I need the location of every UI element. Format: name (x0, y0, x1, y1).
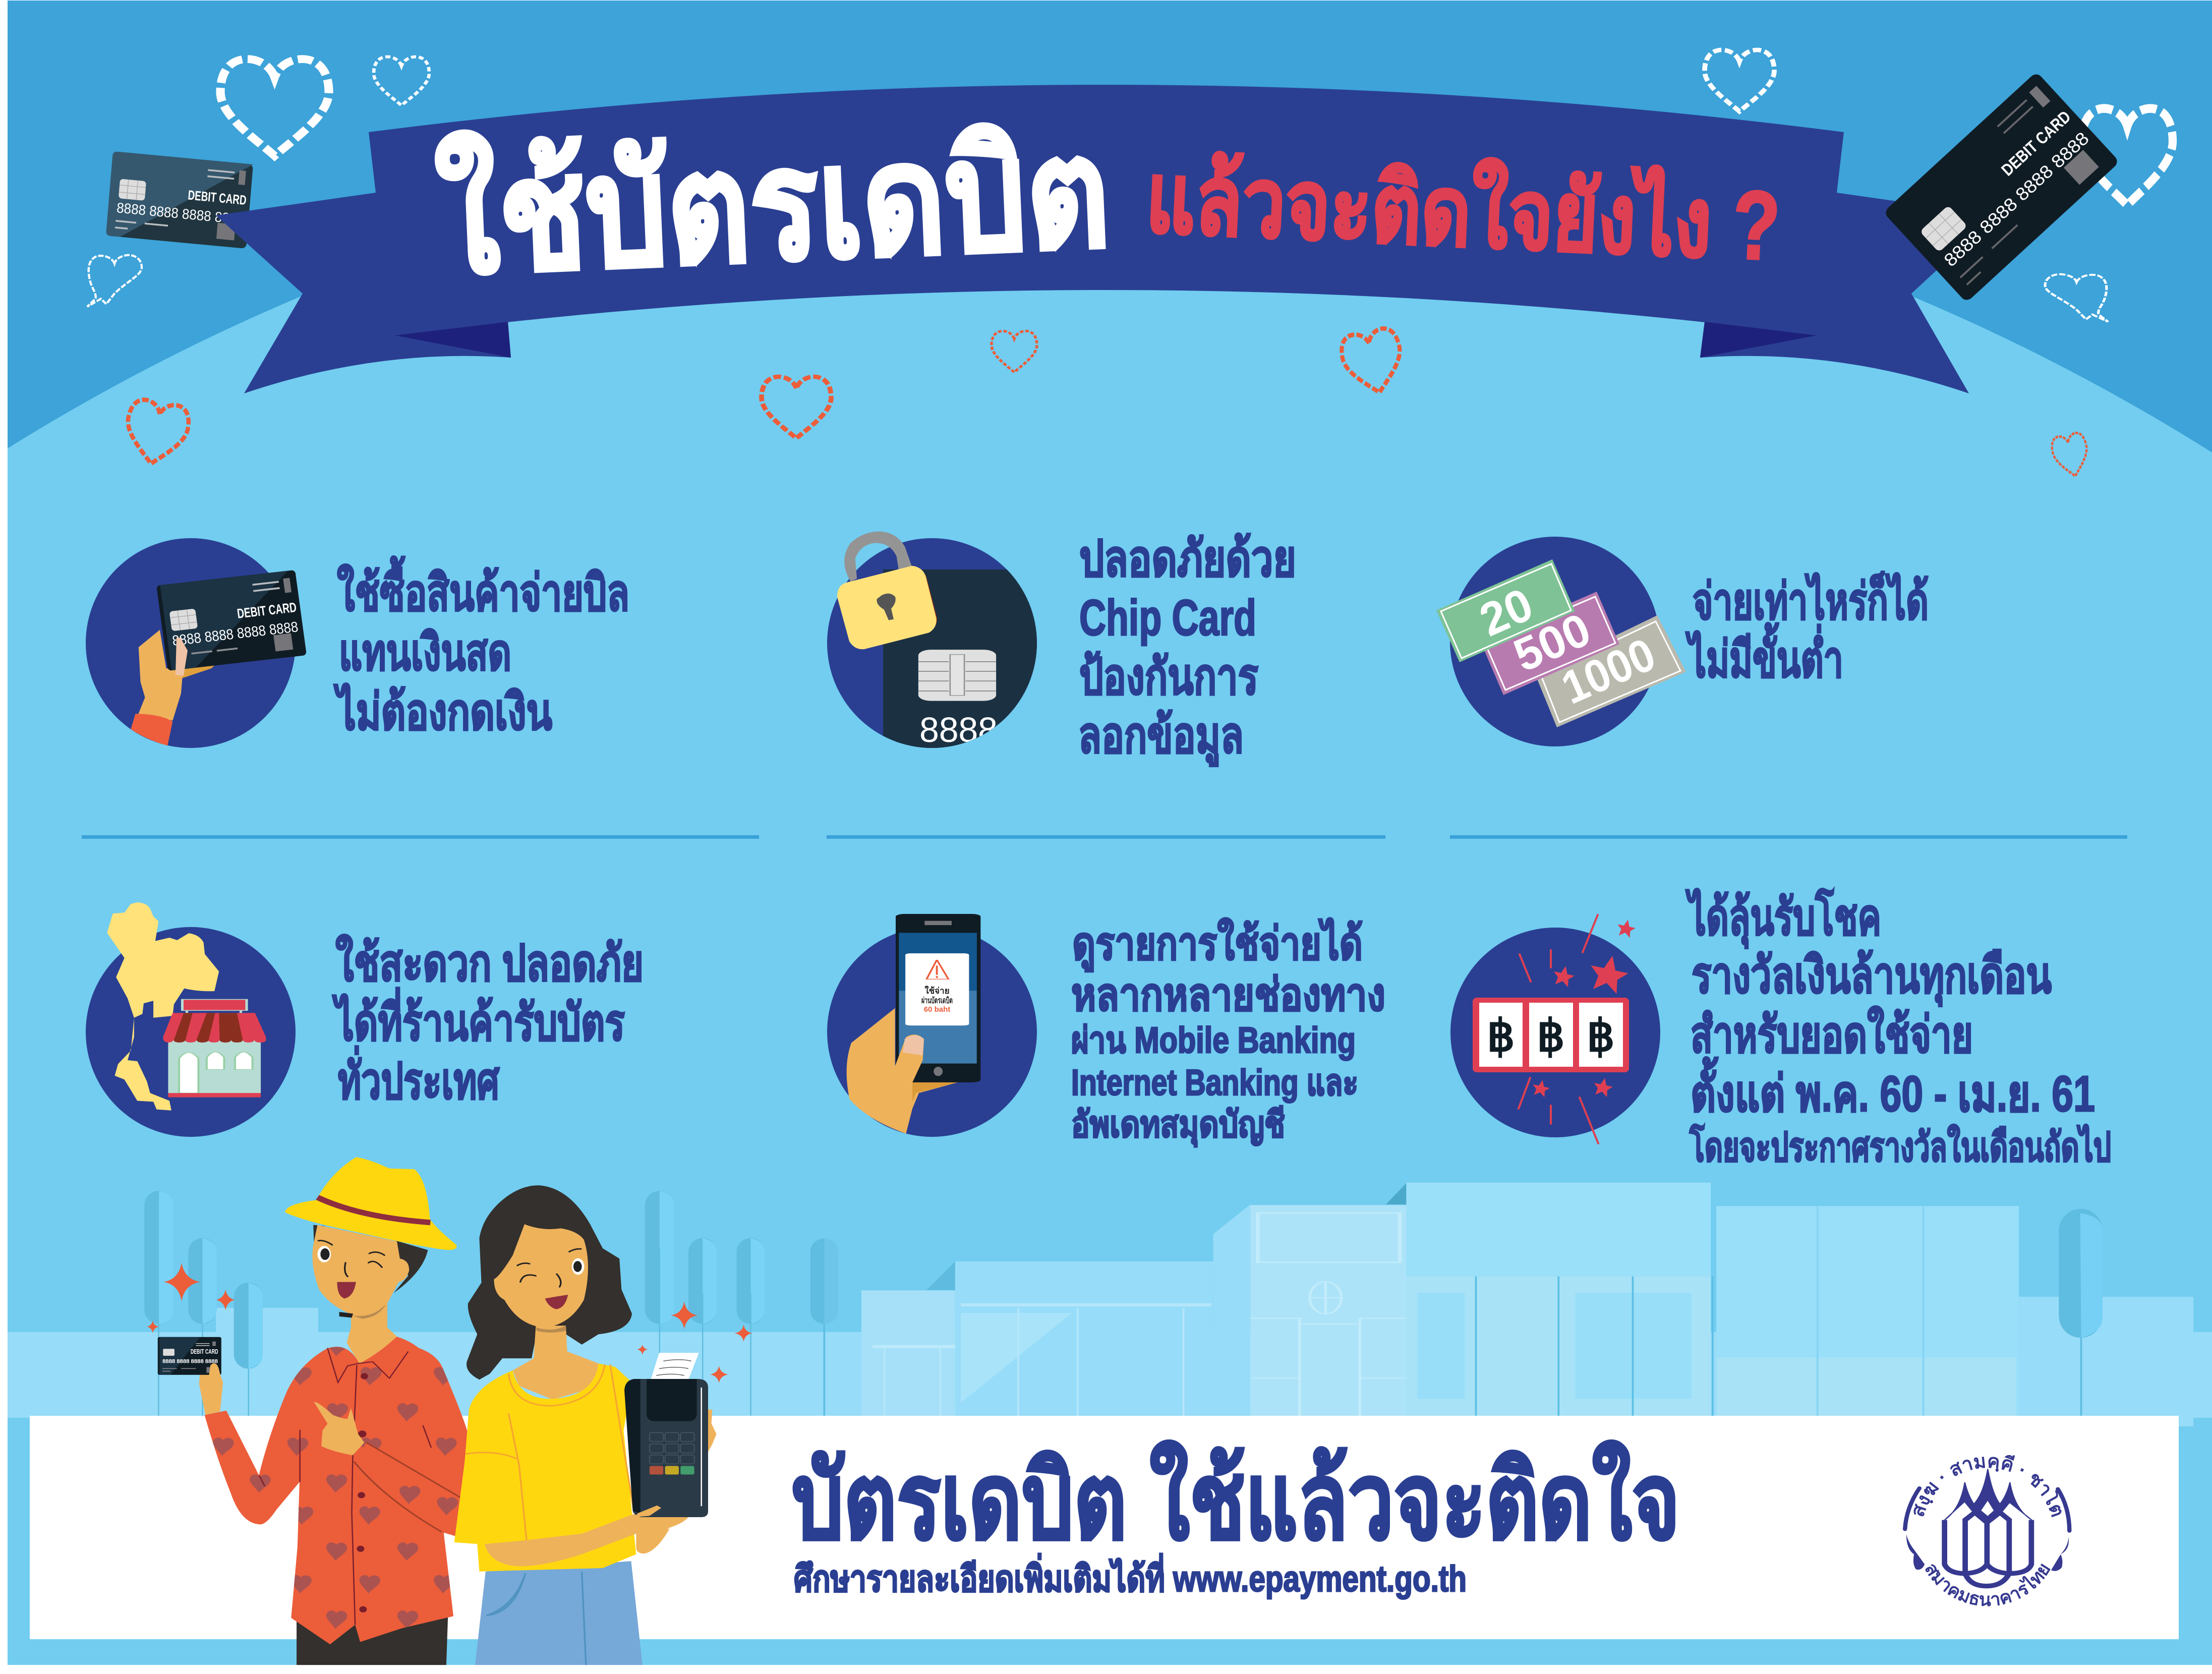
left debit card: 8888 8888 8888 8888 (116, 200, 245, 227)
item 4: shops nationwide (86, 902, 644, 1137)
icon: hand holding card: DEBIT CARD (236, 599, 298, 621)
item 2: chip card security (827, 531, 1296, 767)
man (199, 1225, 468, 1665)
icon: Thailand map and shop (107, 902, 266, 1111)
card in hand (158, 1337, 221, 1375)
text: item 2: ลอกข้อมูล (1078, 707, 1244, 767)
right debit card (1883, 72, 2120, 303)
text: item 3: ไม่มีขั้นต่ำ (1685, 622, 1843, 688)
bottom headline: ศึกษารายละเอียดเพิ่มเติมได้ที่ www.epayment.go.th (794, 1553, 1467, 1599)
left debit card: DEBIT CARD (187, 187, 247, 208)
card in hand: DEBIT CARD (191, 1348, 218, 1355)
text: item 2 (1078, 531, 1296, 767)
title text (433, 103, 1782, 306)
text: item 1: ไม่ต้องกดเงิน (333, 683, 552, 740)
text: item 5: ผ่าน Mobile Banking (1071, 1020, 1356, 1061)
payment terminal (624, 1353, 717, 1517)
logo: Thai Bankers Association: สงฺฆ · สามคฺคี · ชาโต (1913, 1455, 2062, 1517)
icon: slot machine with baht symbols: ฿ (1537, 1011, 1565, 1061)
item 3: banknotes (1436, 537, 1929, 746)
icon: pink note 500 (1481, 592, 1619, 695)
text: item 5: อัพเดทสมุดบัญชี (1071, 1105, 1285, 1147)
card in hand: 8888 8888 8888 8888 (162, 1359, 218, 1364)
text: item 3: จ่ายเท่าไหร่ก็ได้ (1693, 571, 1929, 630)
logo: Thai Bankers Association (1903, 1455, 2072, 1606)
text: item 1: ใช้ซื้อสินค้าจ่ายบิล (337, 556, 629, 621)
text: item 6: ได้ลุ้นรับโชค (1685, 888, 1881, 949)
text: item 6: รางวัลเงินล้านทุกเดือน (1692, 947, 2052, 1007)
sparkles (147, 1263, 752, 1383)
text: item 6: สำหรับยอดใช้จ่าย (1691, 1006, 1973, 1063)
item 1: pay with card (86, 538, 629, 748)
text: item 2: ป้องกันการ (1079, 649, 1258, 705)
icon: pink note 500: 500 (1506, 604, 1598, 682)
yellow hat (285, 1157, 457, 1250)
icon: hand holding card: 8888 8888 8888 8888 (171, 619, 299, 649)
city skyline background (8, 1183, 2212, 1426)
text: item 4: ใช้สะดวก ปลอดภัย (335, 934, 644, 992)
icon: hand holding card (131, 570, 307, 745)
icon: green note 20 (1436, 559, 1575, 662)
text: item 5 (1071, 918, 1385, 1147)
text: item 5: ดูรายการใช้จ่ายได้ (1072, 918, 1363, 972)
dividers (82, 835, 2127, 839)
icon: slot machine with baht symbols: ฿ (1587, 1011, 1615, 1061)
icon: chip card with padlock: 8888 (919, 710, 998, 749)
item 6: prize draw (1450, 888, 2111, 1170)
bottom headline: บัตรเดบิต ใช้แล้วจะติดใจ (792, 1440, 1680, 1561)
icon: green note 20: 20 (1472, 579, 1540, 646)
icon: slot machine with baht symbols: ฿ (1487, 1011, 1515, 1061)
title text: ใช้บัตรเดบิต (433, 103, 1113, 306)
text: item 2: Chip Card (1079, 590, 1256, 646)
title ribbon (216, 85, 1996, 393)
logo: Thai Bankers Association: สมาคมธนาคารไทย (1926, 1564, 2051, 1606)
bottom headline (792, 1440, 1680, 1599)
text: item 5: หลากหลายช่องทาง (1071, 970, 1385, 1020)
text: item 2: ปลอดภัยด้วย (1079, 531, 1296, 587)
text: item 4: ทั่วประเทศ (338, 1046, 500, 1110)
text: item 3 (1685, 571, 1929, 688)
left debit card (106, 151, 253, 249)
icon: chip card with padlock (837, 532, 1044, 751)
icon: grey note 1000 (1535, 615, 1686, 727)
text: item 6 (1685, 888, 2111, 1170)
woman (454, 1185, 690, 1665)
decorative white and red hearts (87, 50, 2173, 480)
thumb (205, 1363, 222, 1400)
characters: man and woman (147, 1157, 752, 1665)
icon: grey note 1000: 1000 (1554, 628, 1663, 714)
text: item 4 (332, 934, 644, 1110)
text: item 1: แทนเงินสด (339, 624, 511, 681)
icon: hand holding phone (847, 914, 980, 1134)
text: item 6: ตั้งแต่ พ.ค. 60 - เม.ย. 61 (1691, 1057, 2095, 1122)
text: item 5: Internet Banking และ (1071, 1063, 1358, 1103)
right debit card: DEBIT CARD (1998, 107, 2074, 180)
text: item 1 (333, 556, 629, 740)
icon: hand holding phone: ผ่านบัตรเดบิต (921, 996, 953, 1005)
item 5: transaction alerts (827, 914, 1385, 1147)
bottom white panel (30, 1416, 2179, 1639)
icon: hand holding phone: 60 baht (924, 1005, 950, 1014)
title text: แล้วจะติดใจยังไง ? (1144, 142, 1782, 280)
text: item 4: ได้ที่ร้านค้ารับบัตร (332, 987, 625, 1051)
icon: hand holding phone: ใช้จ่าย (924, 986, 950, 996)
icon: slot machine with baht symbols (1473, 915, 1637, 1143)
right debit card: 8888 8888 8888 8888 (1940, 128, 2092, 270)
